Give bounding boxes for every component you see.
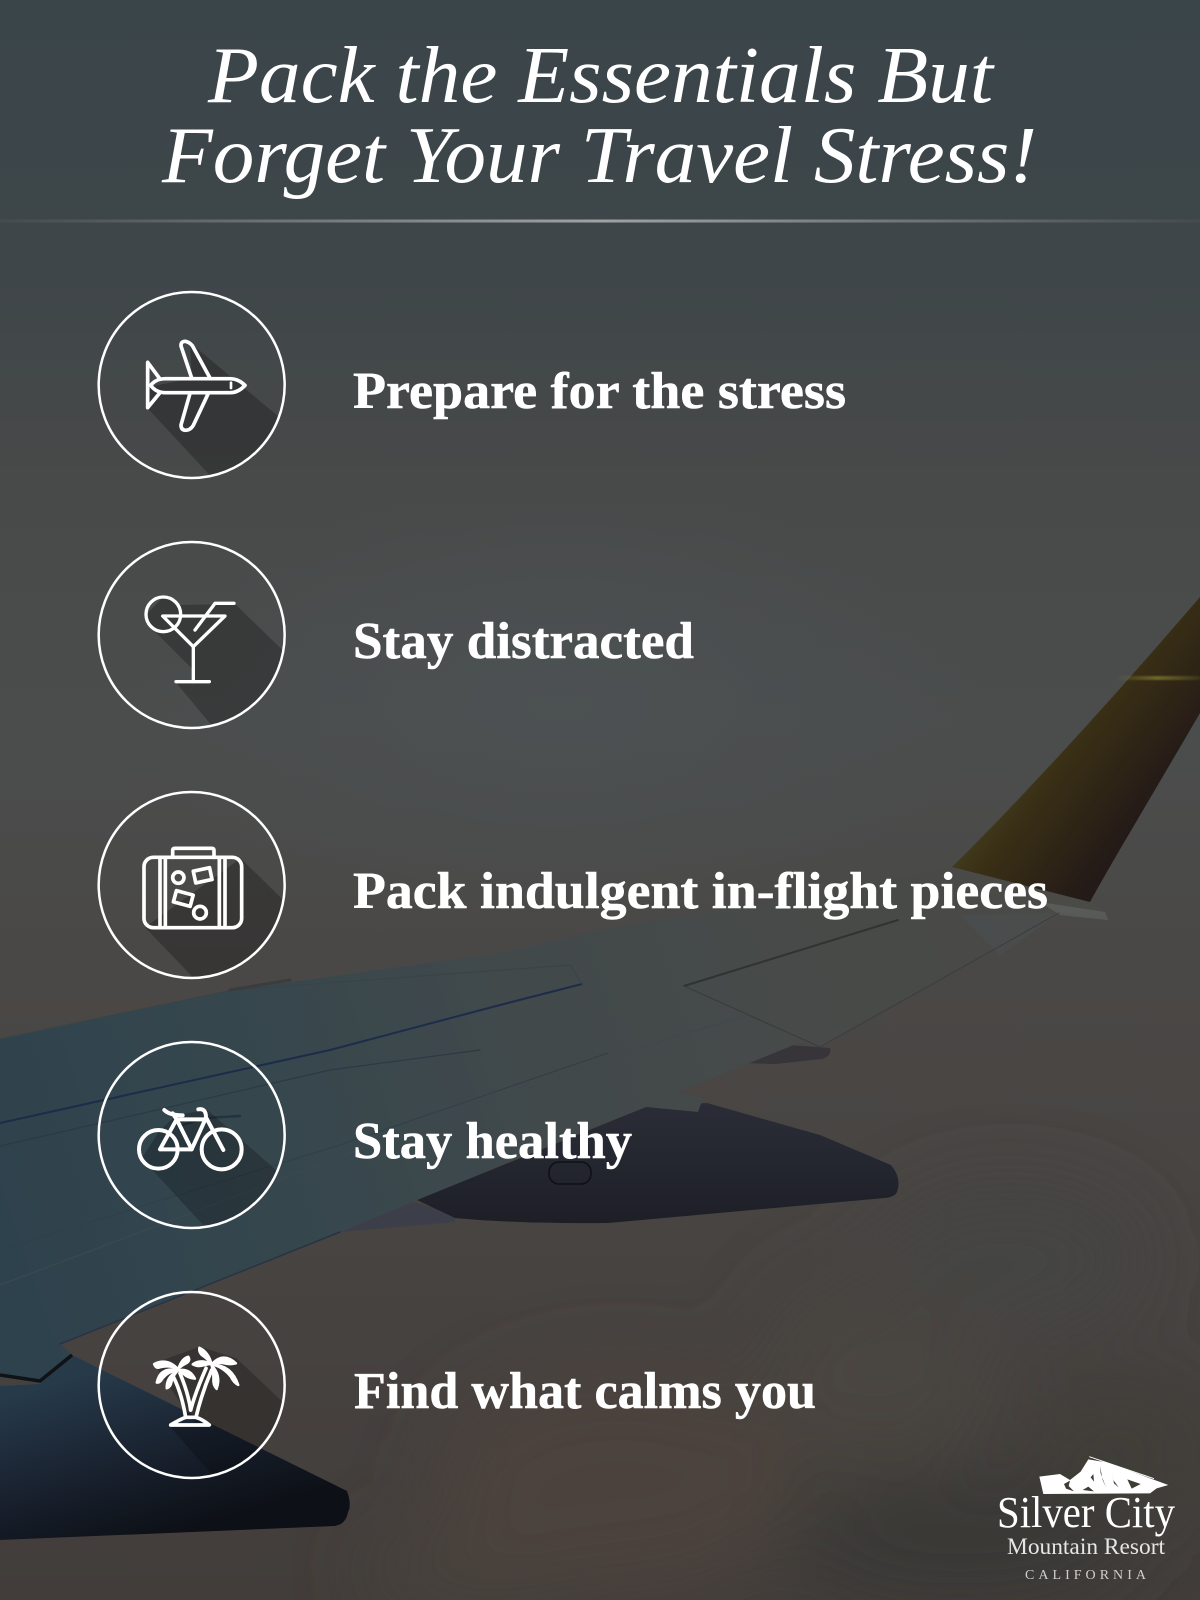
winglet light base (960, 913, 1060, 955)
flap track fairing (745, 1045, 830, 1064)
lens flare on winglet (1115, 676, 1200, 680)
logo: Silver City Mountain Resort (997, 1457, 1175, 1583)
title: Forget Your Travel Stress! (161, 112, 1037, 200)
label: Prepare for the stress (353, 363, 846, 420)
engine hatch (549, 1162, 591, 1184)
item 1: prepare for the stress (99, 292, 846, 493)
label: Find what calms you (354, 1363, 816, 1420)
icon: palm trees in circle (99, 1292, 288, 1493)
icon: airplane in circle (99, 292, 287, 493)
icon: mountain (1039, 1457, 1168, 1494)
icon: bicycle in circle (99, 1042, 287, 1243)
title: Pack the Essentials But (207, 32, 995, 120)
label: Pack indulgent in-flight pieces (353, 863, 1048, 920)
item 2: stay distracted (99, 542, 694, 743)
winglet (880, 597, 1200, 902)
item 4: stay healthy (99, 1042, 632, 1243)
logo: Silver City Mountain Resort: Mountain Resort (1007, 1534, 1166, 1559)
airplane wing (0, 597, 1200, 1540)
logo: Silver City Mountain Resort: CALIFORNIA (1025, 1568, 1147, 1583)
title divider (0, 220, 1200, 222)
icon: suitcase in circle (99, 792, 288, 993)
item 3: pack indulgent in-flight pieces (99, 792, 1048, 993)
label: Stay distracted (353, 613, 694, 670)
label: Stay healthy (353, 1113, 632, 1170)
logo: Silver City Mountain Resort: Silver City (997, 1488, 1175, 1537)
right engine pylon fairing (340, 1202, 455, 1232)
engine nacelle left (0, 1355, 350, 1540)
wing panel lines (0, 913, 1059, 1344)
engine nacelle right (417, 1103, 899, 1223)
wing surface (0, 867, 1108, 1380)
item 5: find what calms you (99, 1292, 816, 1493)
icon: cocktail in circle (99, 542, 287, 743)
title (161, 32, 1037, 200)
